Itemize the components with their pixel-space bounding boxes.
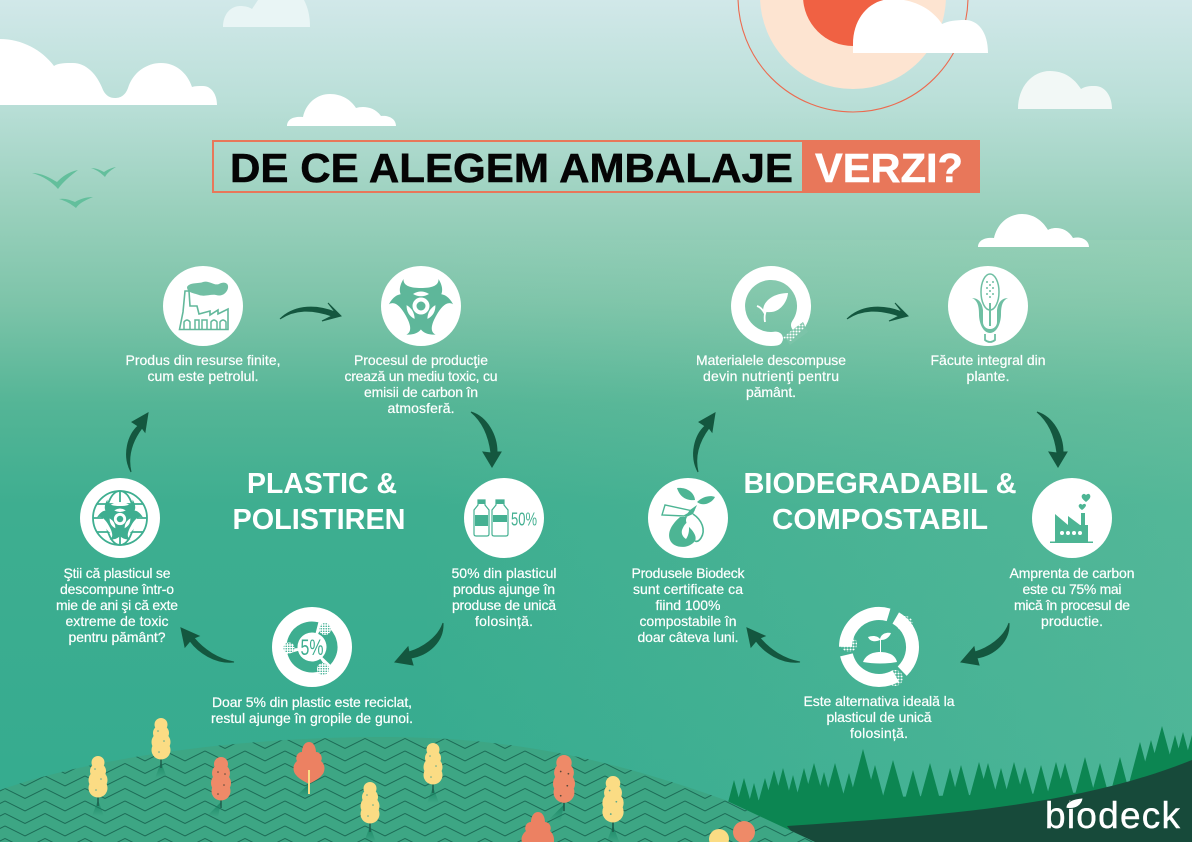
text: plants: Făcute integral din [930, 352, 1046, 368]
title banner [213, 140, 980, 193]
tree: yellow [602, 776, 624, 842]
text: single use: 50% din plasticul [452, 565, 556, 581]
text: ideal alternative [804, 693, 955, 741]
text: carbon footprint: Amprenta de carbon [1010, 565, 1134, 581]
text: carbon footprint: mică în procesul de [1014, 597, 1130, 613]
text: decomposition: descompune într-o [60, 581, 174, 597]
icon: globe biohazard [80, 478, 160, 558]
text: finite resources: cum este petrolul. [148, 368, 258, 384]
text: toxic process [344, 352, 498, 416]
forest [722, 726, 1192, 842]
text: finite resources [126, 352, 280, 384]
tree: orange [550, 755, 575, 821]
text: toxic process: atmosferă. [388, 400, 454, 416]
text: carbon footprint: este cu 75% mai [1022, 581, 1122, 597]
title text: DE CE ALEGEM AMBALAJE [230, 145, 793, 191]
text: certified: doar câteva luni. [638, 629, 738, 645]
icon: logo leaf [1066, 798, 1083, 808]
arrow [847, 303, 908, 321]
tree: orange [208, 757, 231, 817]
arrow [280, 303, 341, 321]
text: nutrients [696, 352, 846, 400]
text: decomposition: pentru pământ? [68, 629, 166, 645]
tree: yellow [424, 743, 442, 803]
text: plants: plante. [966, 368, 1010, 384]
tree: orange leaf [294, 742, 324, 798]
text: plants [930, 352, 1046, 384]
text: recycled: restul ajunge în gropile de gunoi. [211, 710, 413, 726]
icon: 5% donut [272, 607, 352, 687]
logo: biodeck [1045, 795, 1180, 836]
sun [738, 0, 968, 112]
icon: ring with sprout [738, 273, 808, 345]
text: toxic process: emisii de carbon în [364, 384, 478, 400]
cloud: right faint [1018, 71, 1112, 109]
title highlight: VERZI? [815, 145, 963, 191]
arrow [961, 623, 1009, 665]
text: nutrients: devin nutrienţi pentru [703, 368, 839, 384]
arrow [694, 413, 715, 472]
tree: orange leaf bottom [521, 812, 554, 842]
arrow [395, 623, 443, 665]
icon: biohazard [381, 266, 461, 346]
cloud: small middle [287, 94, 396, 126]
text: nutrients: Materialele descompuse [696, 352, 846, 368]
icon: biodeck ribbon with leaves [648, 478, 728, 558]
cloud: faint top [223, 0, 310, 27]
text: recycled [211, 694, 413, 726]
tree: yellow [360, 782, 380, 842]
tree: yellow bottom [709, 829, 729, 842]
text: single use: folosință. [475, 613, 533, 629]
icon: 5% donut: 5% [300, 635, 324, 660]
heading: plastic: POLISTIREN [232, 504, 406, 536]
text: ideal alternative: plasticul de unică [826, 709, 932, 725]
arrow [747, 628, 800, 662]
text: ideal alternative: folosință. [850, 725, 908, 741]
heading: compostable: COMPOSTABIL [772, 504, 988, 536]
arrow [471, 412, 501, 467]
text: finite resources: Produs din resurse finite, [126, 352, 280, 368]
text: single use: produse de unică [452, 597, 556, 613]
text: single use: produs ajunge în [453, 581, 555, 597]
icon: bottles 50%: 50% [511, 510, 537, 530]
text: decomposition: mie de ani şi că exte [56, 597, 178, 613]
text: carbon footprint: productie. [1041, 613, 1103, 629]
text: certified: Produsele Biodeck [632, 565, 746, 581]
icon: green factory [1032, 478, 1112, 558]
birds [32, 167, 116, 208]
arrow [181, 628, 234, 662]
tree: yellow [88, 756, 108, 816]
arrow [127, 413, 148, 472]
text: single use [452, 565, 556, 629]
panel: compostable cycle [632, 266, 1134, 741]
text: recycled: Doar 5% din plastic este reciclat, [212, 694, 412, 710]
tree: orange bottom [733, 821, 755, 842]
icon: sprout ring [833, 601, 925, 693]
tree: yellow [152, 718, 170, 778]
text: toxic process: crează un mediu toxic, cu [344, 368, 498, 384]
text: decomposition: extreme de toxic [66, 613, 168, 629]
text: decomposition: Ştii că plasticul se [64, 565, 171, 581]
cloud: large left [0, 39, 217, 105]
green hill with zigzag [0, 730, 820, 842]
text: decomposition [56, 565, 178, 645]
cloud: over sun [853, 0, 988, 53]
text: ideal alternative: Este alternativa ideală la [804, 693, 955, 709]
dark hill [787, 760, 1192, 842]
panel: plastic cycle [56, 266, 556, 726]
icon: factory with smoke [163, 266, 243, 346]
heading: compostable [744, 468, 1017, 536]
text: nutrients: pământ. [746, 384, 796, 400]
icon: bottles 50% [464, 478, 544, 558]
text: certified: compostabile în [640, 613, 736, 629]
heading: plastic [232, 468, 406, 536]
text: certified [632, 565, 746, 645]
heading: plastic: PLASTIC & [247, 468, 397, 500]
text: certified: sunt certificate ca [633, 581, 743, 597]
text: toxic process: Procesul de producţie [354, 352, 488, 368]
text: carbon footprint [1010, 565, 1134, 629]
cloud: lower right [978, 214, 1089, 247]
heading: compostable: BIODEGRADABIL & [744, 468, 1017, 500]
arrow [1037, 412, 1067, 467]
text: certified: fiind 100% [656, 597, 720, 613]
icon: corn [948, 266, 1028, 346]
